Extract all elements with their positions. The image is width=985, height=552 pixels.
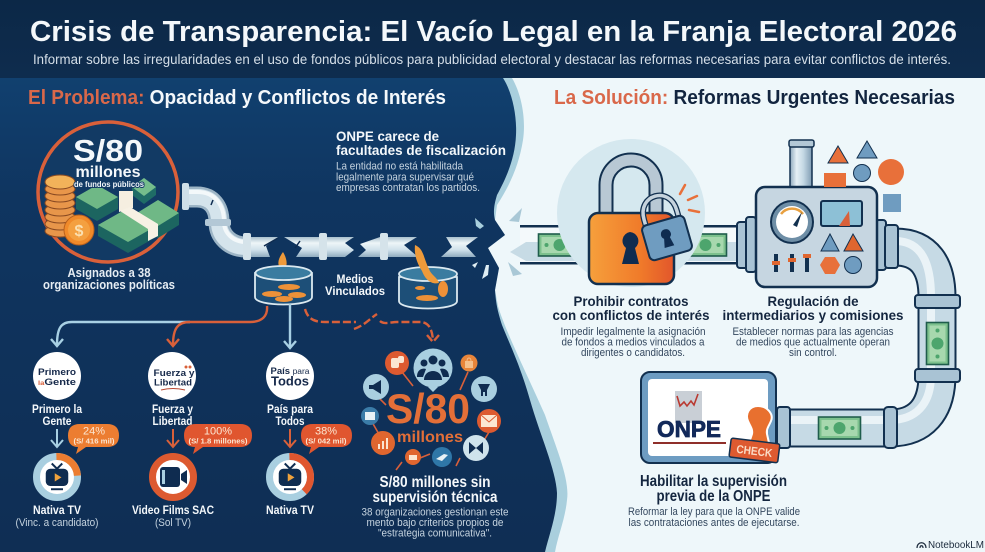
small padlock — [634, 190, 693, 261]
shackle — [606, 160, 656, 215]
party: Pais para Todos: Todos — [276, 416, 304, 428]
logo: Primero — [38, 367, 76, 378]
lock body — [589, 213, 674, 284]
money caption: organizaciones políticas — [43, 278, 175, 292]
cluster amount: S/80 — [386, 385, 470, 432]
bubble 38%: 38% — [315, 426, 337, 438]
icon: grid — [361, 407, 379, 425]
solution text: prohibir — [552, 293, 710, 359]
solution text: prohibir: dirigentes o candidatos. — [581, 347, 685, 359]
medios vinculados label: Vinculados — [325, 286, 385, 298]
icon: people — [414, 348, 452, 392]
divider light band — [0, 78, 567, 552]
meter — [821, 201, 862, 226]
crack shards on solution side — [508, 208, 522, 276]
onpe callout: facultades de fiscalización — [336, 142, 506, 158]
coin stack — [45, 175, 75, 237]
party: Primero la Gente: (Vinc. a candidato) — [16, 517, 98, 529]
heading: la solucion: La Solución: Reformas Urgentes Necesarias — [554, 86, 955, 109]
pipe left — [510, 225, 740, 264]
floating shapes — [857, 141, 877, 158]
onpe emblem — [675, 391, 702, 423]
solution text: habilitar: las contrataciones antes de ejecutarse. — [628, 517, 800, 529]
money caption: Asignados a 38 — [68, 266, 151, 280]
ONPE card — [641, 372, 780, 463]
S/80 icon cluster — [361, 348, 501, 470]
supervision text block — [362, 474, 508, 540]
arrow: light to Primero la Gente — [51, 322, 190, 346]
arrow: dashed broken to S/80 — [305, 309, 439, 342]
supervision text block: "estrategia comunicativa". — [378, 528, 492, 540]
onpe callout — [336, 128, 506, 194]
supervision text block: 38 organizaciones gestionan este — [362, 506, 508, 518]
arrow — [167, 429, 179, 447]
logo — [33, 352, 81, 400]
solution text: regulacion: intermediarios y comisiones — [722, 307, 904, 323]
onpe callout: La entidad no está habilitada — [336, 160, 464, 172]
party: Fuerza y Libertad: (Sol TV) — [155, 517, 191, 529]
regulator machine — [756, 140, 904, 287]
bubble 24%: 24% — [83, 426, 105, 438]
bubble 38% — [301, 424, 352, 454]
logo — [266, 352, 314, 400]
onpe wordmark: ONPE — [657, 416, 721, 442]
party: Primero la Gente: Nativa TV — [33, 503, 81, 517]
sliders — [776, 254, 807, 272]
supervision text block: supervisión técnica — [372, 489, 498, 506]
solution text: prohibir: Prohibir contratos — [574, 293, 689, 309]
bubble 100%: (S/ 1.8 millones) — [188, 436, 248, 446]
stamp: CHECK — [736, 444, 773, 460]
solution text: regulacion: de medios que actualmente operan — [736, 336, 890, 348]
party: Fuerza y Libertad: Libertad — [152, 416, 192, 428]
party: Fuerza y Libertad — [132, 352, 252, 529]
broken pipeline — [182, 183, 489, 279]
logo — [148, 352, 196, 400]
solution text: regulacion: sin control. — [789, 347, 837, 359]
supervision text block: S/80 millones sin — [380, 474, 490, 491]
icon: cauldron — [405, 449, 421, 465]
top pipe — [790, 143, 812, 187]
logo: País para — [270, 366, 310, 376]
party: Primero la Gente — [16, 352, 119, 529]
solution text: habilitar: previa de la ONPE — [656, 488, 770, 505]
money caption — [43, 266, 175, 292]
bubble 100%: 100% — [204, 426, 232, 438]
pipe collars — [737, 217, 960, 448]
solution text: habilitar: Reformar la ley para que la ONPE valide — [628, 506, 800, 518]
fondos label: de fundos públicos — [74, 179, 144, 189]
keyhole — [622, 232, 639, 264]
logo: Fuerza y — [154, 368, 195, 379]
solution text: prohibir: de fondos a medios vinculados a — [562, 336, 705, 348]
arrow — [51, 429, 63, 447]
millones label: millones — [76, 164, 141, 181]
onpe callout: empresas contratan los partidos. — [336, 182, 480, 194]
gauge — [771, 201, 813, 243]
supervision text block: mento bajo criterios propios de — [366, 517, 504, 529]
solution text: regulacion: Regulación de — [768, 293, 859, 309]
icon: film — [463, 435, 489, 461]
logo: Libertad — [154, 378, 192, 388]
icon: envelope — [477, 409, 501, 433]
solution text: regulacion — [722, 293, 904, 359]
flow arrows — [51, 304, 439, 348]
tub left — [255, 252, 312, 304]
solution text: prohibir: Impedir legalmente la asignación — [560, 326, 706, 338]
large coin — [64, 215, 94, 245]
solution text: prohibir: con conflictos de interés — [552, 307, 710, 323]
party: Primero la Gente: Primero la — [32, 404, 83, 416]
padlock group — [557, 139, 705, 287]
large coin: $ — [75, 223, 84, 240]
arrow: orange to Fuerza y Libertad — [167, 306, 267, 346]
tub right — [399, 245, 457, 308]
icon: fighters — [471, 376, 497, 402]
shapes on panel — [844, 234, 863, 251]
right elbow pipe — [785, 241, 948, 439]
party: Fuerza y Libertad: Video Films SAC — [132, 503, 214, 517]
subtitle: Informar sobre las irregularidades en el uso de fondos públicos para publicidad electoral y destacar las reformas necesarias para evitar conflictos de interés. — [33, 52, 951, 67]
solution text: regulacion: Establecer normas para las agencias — [732, 326, 894, 338]
onpe callout: legalmente para supervisar qué — [336, 172, 474, 184]
bubble 100% — [184, 424, 252, 454]
logo: Todos — [271, 374, 309, 388]
party: Pais para Todos: Nativa TV — [266, 503, 314, 517]
icon connectors — [372, 372, 489, 470]
donut — [270, 456, 310, 498]
party: Pais para Todos: País para — [267, 404, 314, 416]
header band — [0, 0, 985, 78]
donut — [152, 456, 194, 498]
bubble 38%: (S/ 042 mil) — [306, 436, 347, 446]
icon: megaphone — [363, 374, 389, 400]
party: Pais para Todos — [266, 352, 352, 517]
logo: laGente — [38, 377, 76, 388]
party: Fuerza y Libertad: Fuerza y — [152, 404, 194, 416]
icon: chart — [371, 431, 395, 455]
bubble 24% — [68, 424, 119, 454]
money circle — [38, 122, 179, 262]
cluster label: millones — [397, 429, 463, 446]
cash stacks — [76, 178, 179, 253]
medios vinculados label — [325, 274, 385, 298]
party: Primero la Gente: Gente — [42, 416, 72, 428]
solution pipeline — [510, 217, 960, 448]
medios vinculados label: Medios — [336, 274, 374, 286]
solution text: habilitar: Habilitar la supervisión — [640, 473, 787, 490]
money amount: S/80 — [73, 133, 143, 168]
icon: bag — [460, 354, 478, 372]
icon: hand — [432, 447, 452, 467]
solution text: habilitar — [628, 473, 800, 529]
title: Crisis de Transparencia: El Vacío Legal en la Franja Electoral 2026 — [30, 16, 957, 48]
background: problem side — [0, 78, 557, 552]
arrow: light to Pais para Todos — [284, 304, 296, 348]
icon: chat — [385, 351, 409, 375]
onpe callout: ONPE carece de — [336, 128, 439, 144]
arrow — [284, 429, 296, 447]
bubble 24%: (S/ 416 mil) — [74, 436, 115, 446]
donut — [36, 456, 78, 498]
spark marks — [680, 185, 699, 212]
heading: el problema: El Problema: Opacidad y Conflictos de Interés — [28, 86, 446, 109]
machine body — [756, 187, 877, 287]
